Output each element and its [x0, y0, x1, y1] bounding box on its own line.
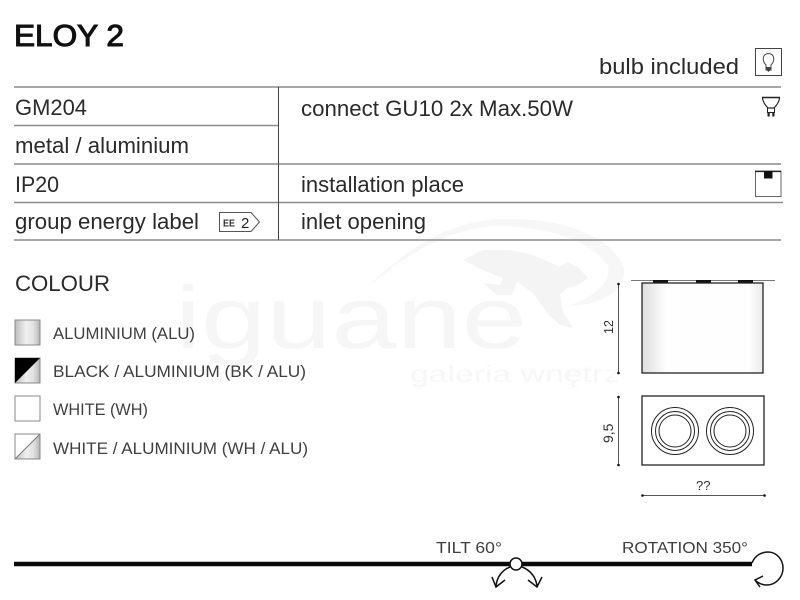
icon: rotation arrow [752, 552, 783, 587]
icon: energy label tag: EE [223, 218, 235, 230]
label: aluminium: ALUMINIUM (ALU) [53, 325, 195, 343]
bulb included label: bulb included [599, 54, 739, 79]
icon: installation place [755, 171, 781, 196]
icon: tilt joint with arrows [492, 558, 542, 587]
heading: colour: COLOUR [15, 271, 110, 296]
dimension: width: ?? [696, 478, 710, 493]
swatch: white [15, 396, 40, 421]
label: white / aluminium: WHITE / ALUMINIUM (WH / ALU) [53, 440, 308, 458]
label: white: WHITE (WH) [53, 401, 148, 419]
icon: bulb included [756, 48, 782, 76]
label: tilt: TILT 60° [436, 540, 502, 557]
swatch: white / aluminium [15, 434, 40, 459]
diagram: side view [602, 280, 775, 374]
swatch: aluminium [15, 320, 40, 345]
watermark: iguane logo [175, 219, 624, 387]
dimension: 9,5: 9,5 [600, 423, 616, 443]
row text: inlet opening: inlet opening [301, 209, 426, 234]
row text: GM204: GM204 [15, 95, 87, 120]
diagram: bottom view [600, 396, 766, 497]
icon: energy label tag: 2 [241, 215, 249, 232]
row text: connect: connect GU10 2x Max.50W [301, 96, 573, 121]
row text: metal / aluminium: metal / aluminium [15, 133, 189, 158]
title: ELOY 2 [14, 18, 124, 53]
arm line [14, 562, 752, 566]
icon: energy label tag [220, 212, 260, 232]
specification table [14, 87, 783, 240]
label: rotation: ROTATION 350° [622, 540, 748, 557]
dimension: height 12: 12 [602, 320, 616, 334]
colour legend [15, 320, 308, 459]
row text: IP20: IP20 [15, 172, 59, 197]
row text: group energy label: group energy label [15, 209, 199, 234]
icon: GU10 lamp [762, 98, 780, 116]
row text: installation place: installation place [301, 172, 464, 197]
watermark: iguane logo: galeria wnętrz [410, 361, 620, 387]
watermark: iguane logo: iguane [175, 268, 527, 367]
swatch: black / aluminium [15, 358, 40, 383]
label: black / aluminium: BLACK / ALUMINIUM (BK / ALU) [53, 363, 306, 381]
